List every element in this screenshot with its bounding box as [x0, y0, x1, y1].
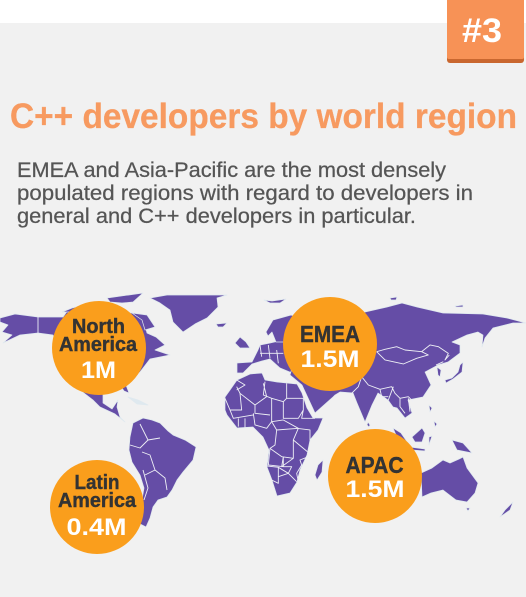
callout: EMEA: 1.5M	[300, 346, 360, 373]
callout: North America: North	[72, 316, 125, 338]
callout: Latin America: America	[58, 490, 137, 512]
map: Australia	[421, 457, 478, 502]
map: Philippines	[429, 405, 437, 427]
map: Japan and Korea	[437, 362, 463, 383]
map: Africa	[225, 373, 323, 496]
callout: North America: America	[59, 334, 138, 356]
callout: Latin America	[50, 460, 144, 554]
callout: Latin America: Latin	[74, 472, 120, 494]
callout: North America: 1M	[81, 357, 116, 384]
badge: number 3: #3	[462, 12, 502, 50]
map: New Zealand and Tasmania	[466, 502, 513, 517]
intro text block: general and C++ developers in particular.	[17, 204, 416, 228]
map: Borneo and Sulawesi	[412, 428, 432, 445]
map: Sumatra and Java	[393, 428, 425, 451]
title: C++ developers by world region	[10, 97, 517, 136]
callout: APAC: 1.5M	[346, 476, 404, 503]
map: South America	[129, 418, 196, 527]
callout: EMEA	[283, 297, 377, 391]
map: British Isles	[235, 337, 250, 348]
intro text block: populated regions with regard to developers in	[17, 181, 473, 205]
map: North America	[0, 293, 227, 422]
intro text block	[17, 158, 473, 228]
callout: North America	[52, 301, 146, 395]
callout: EMEA: EMEA	[300, 321, 360, 347]
intro text block: EMEA and Asia-Pacific are the most densely	[17, 158, 446, 182]
map: Scandinavia	[266, 315, 300, 342]
map: Arctic islands	[264, 299, 286, 303]
map: Kamchatka and Sakhalin islands	[390, 297, 463, 307]
map: Sri Lanka	[367, 422, 370, 427]
map: Asia	[290, 303, 526, 422]
callout: APAC	[328, 429, 422, 523]
map: Europe	[237, 340, 300, 373]
callout: Latin America: 0.4M	[66, 514, 126, 541]
map: Madagascar	[315, 460, 323, 480]
map: New Guinea	[452, 440, 472, 453]
badge: number 3	[447, 0, 524, 63]
map: country borders	[38, 316, 449, 500]
callout: APAC: APAC	[346, 452, 404, 478]
world map	[0, 293, 526, 527]
